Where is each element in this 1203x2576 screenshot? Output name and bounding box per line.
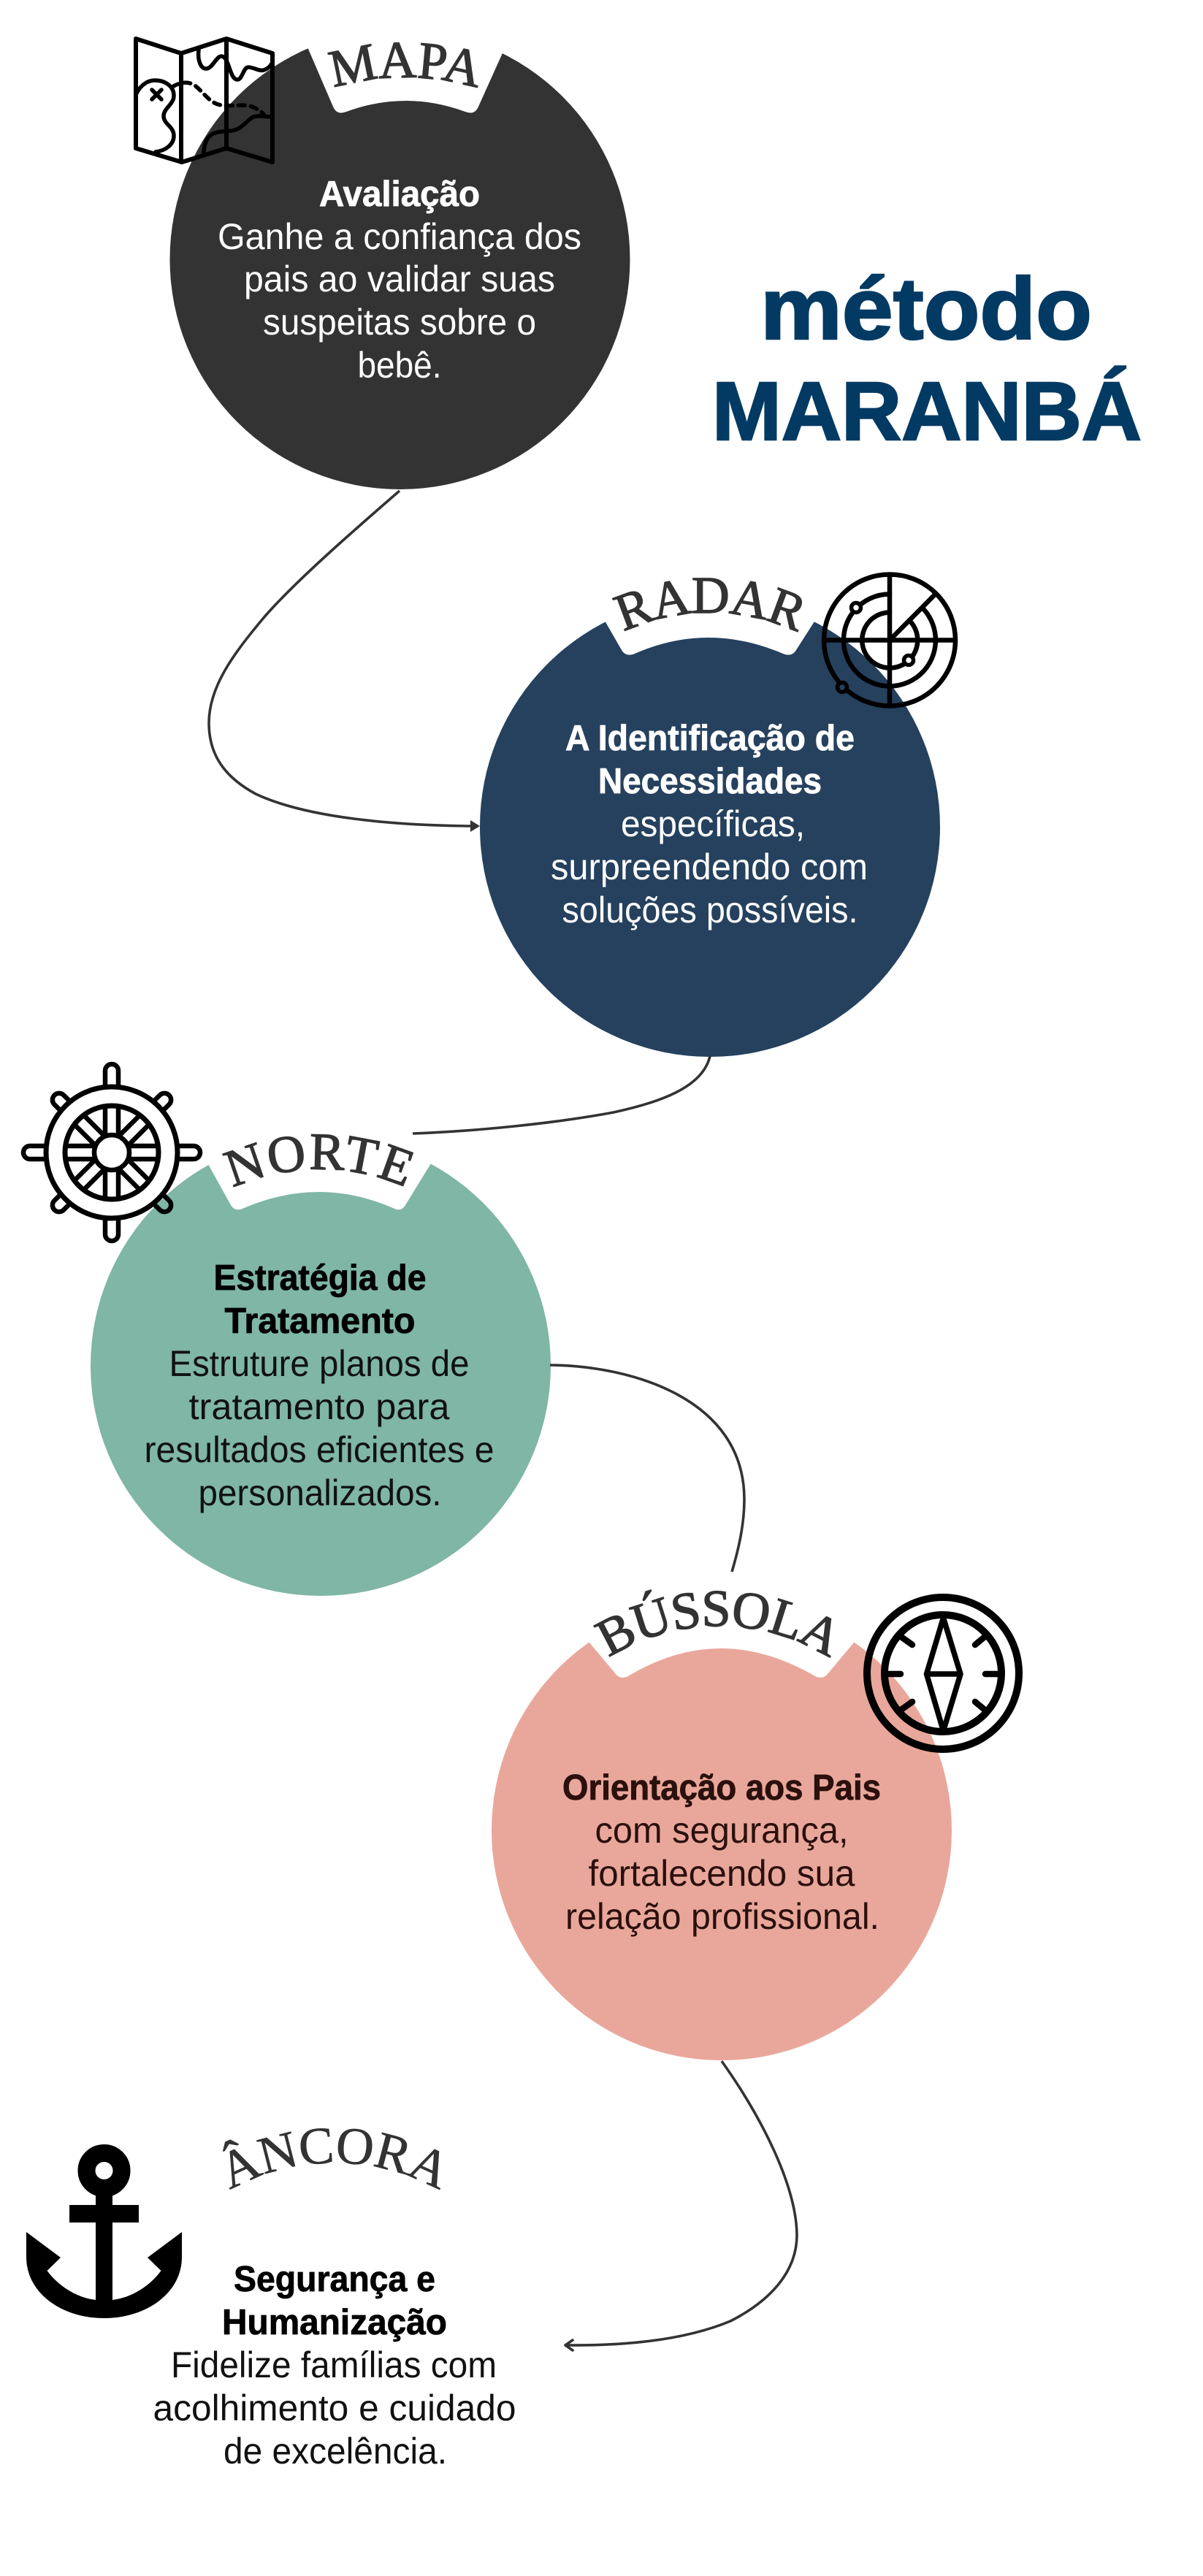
text: ancora: de excelência.: [224, 2431, 447, 2472]
text: mapa: Ganhe a confiança dos: [218, 216, 581, 257]
panel: bussola: [492, 1579, 1019, 2060]
panel: mapa: [134, 37, 630, 489]
circle: bussola: [492, 1600, 952, 2060]
text: bussola: com segurança,: [595, 1810, 849, 1851]
text: radar: Necessidades: [598, 762, 822, 801]
connector: radar to norte: [413, 1056, 710, 1134]
connector: bussola to ancora: [565, 2061, 797, 2350]
heading: ancora: ÂNCORA: [223, 2128, 441, 2190]
text: ancora: Humanização: [222, 2303, 447, 2342]
text: ancora: [153, 2260, 516, 2472]
text: mapa: pais ao validar suas: [244, 259, 555, 299]
text: radar: soluções possíveis.: [562, 890, 858, 930]
text: ancora: Segurança e: [234, 2260, 435, 2299]
connector: norte to bussola: [550, 1365, 744, 1572]
text: bussola: Orientação aos Pais: [562, 1768, 881, 1808]
icon: radar: [824, 574, 955, 706]
panel: norte: [23, 1064, 551, 1596]
text: ancora: acolhimento e cuidado: [153, 2388, 516, 2428]
text: mapa: suspeitas sobre o: [263, 302, 536, 343]
text: norte: Tratamento: [225, 1302, 415, 1341]
notch: bussola: [589, 1581, 854, 1678]
circle: radar: [480, 597, 940, 1057]
heading: mapa: MAPA: [327, 42, 478, 88]
text: bussola: fortalecendo sua: [589, 1853, 855, 1894]
icon: map: [136, 39, 272, 162]
text: radar: [551, 719, 868, 930]
text: norte: [145, 1258, 494, 1513]
text: mapa: [218, 175, 581, 386]
icon: compass: [867, 1597, 1019, 1749]
notch: norte: [208, 1117, 431, 1209]
connector: mapa to radar: [209, 491, 480, 832]
text: radar: A Identificação de: [565, 719, 855, 758]
panel: radar: [480, 566, 955, 1057]
text: norte: resultados eficientes e: [145, 1429, 494, 1470]
text: mapa: Avaliação: [319, 175, 480, 214]
panel: ancora: [26, 2116, 516, 2472]
icon: anchor: [26, 2153, 182, 2318]
text: norte: Estratégia de: [213, 1258, 427, 1298]
text: bussola: [562, 1768, 881, 1937]
heading: norte: NORTE: [222, 1134, 413, 1188]
text: norte: tratamento para: [188, 1386, 450, 1427]
notch: mapa: [306, 15, 505, 112]
text: bussola: relação profissional.: [565, 1896, 879, 1937]
title: método: [760, 260, 1092, 358]
title: [712, 260, 1142, 457]
title: MARANBÁ: [712, 365, 1142, 457]
heading: bussola: BÚSSOLA: [593, 1589, 831, 1658]
text: mapa: bebê.: [358, 345, 441, 386]
circle: norte: [91, 1136, 551, 1596]
text: norte: personalizados.: [199, 1472, 441, 1513]
text: radar: específicas,: [621, 803, 805, 844]
icon: ship wheel: [23, 1064, 200, 1241]
heading: radar: RADAR: [612, 578, 802, 632]
text: ancora: Fidelize famílias com: [171, 2344, 497, 2385]
text: norte: Estruture planos de: [169, 1343, 469, 1384]
notch: radar: [605, 570, 814, 655]
text: radar: surpreendendo com: [551, 846, 868, 887]
circle: mapa: [169, 29, 630, 489]
